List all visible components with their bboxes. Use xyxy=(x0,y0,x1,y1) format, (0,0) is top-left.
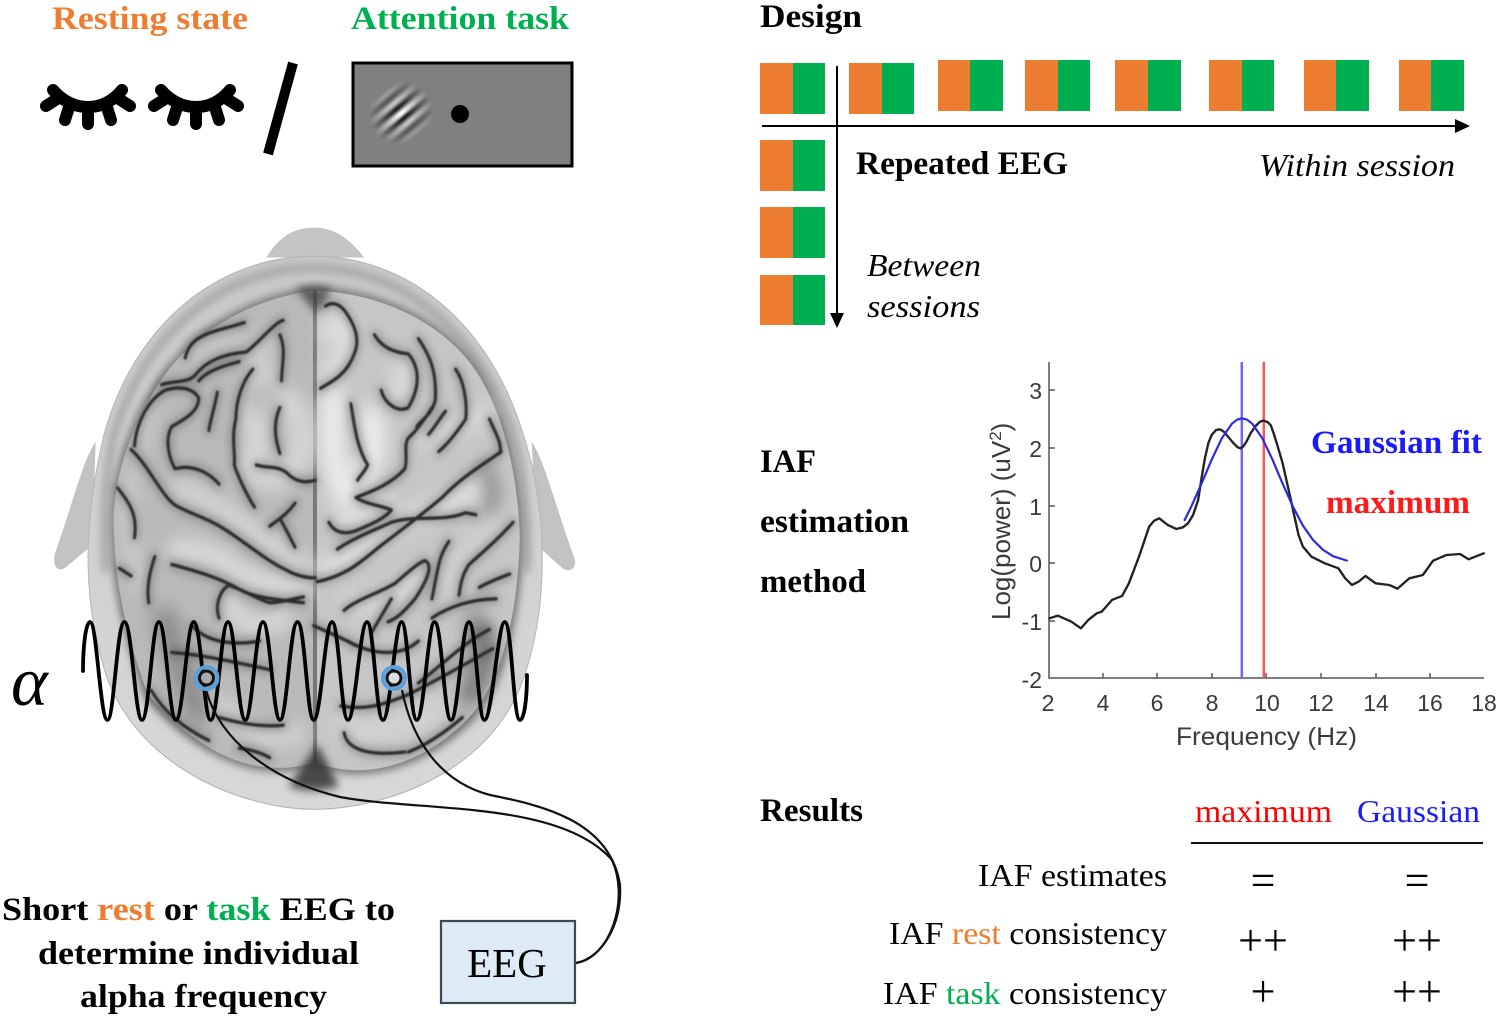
y axis title: Log(power) (uV xyxy=(986,441,1016,620)
x axis tick labels xyxy=(1042,690,1497,716)
column header: maximum: maximum xyxy=(1195,793,1332,829)
x axis title: Frequency (Hz) xyxy=(1176,723,1357,751)
nose bump xyxy=(266,228,364,258)
row: IAF rest consistency: ++ xyxy=(1238,916,1288,965)
right hemisphere xyxy=(317,291,520,770)
row: IAF rest consistency xyxy=(889,915,1442,965)
arrow: between sessions axis xyxy=(830,66,844,328)
right ear xyxy=(532,442,575,570)
heading: design: Design xyxy=(760,0,862,35)
x axis tick labels: 16 xyxy=(1417,690,1443,716)
head outline xyxy=(88,256,542,809)
icon: closed eyes xyxy=(46,90,238,124)
design diagram: within-session blocks xyxy=(760,60,1464,114)
label: repeated EEG: Repeated EEG xyxy=(856,146,1068,182)
legend: maximum: maximum xyxy=(1326,485,1470,521)
icon: right closed eye xyxy=(154,90,238,124)
marker: maximum line xyxy=(1263,362,1265,678)
x axis tick labels: 4 xyxy=(1097,690,1110,716)
row: IAF task consistency: IAF task consistency xyxy=(883,975,1167,1011)
arrow: within session axis xyxy=(762,119,1470,133)
y axis tick labels: 2 xyxy=(1029,436,1042,462)
left hemisphere xyxy=(114,291,313,768)
y axis title: 2 xyxy=(986,431,1005,441)
y axis tick labels: 1 xyxy=(1029,494,1042,520)
x axis tick labels: 10 xyxy=(1254,690,1280,716)
y axis tick labels xyxy=(1022,378,1042,693)
alpha symbol: α xyxy=(11,644,49,721)
label: IAF estimation method: IAF xyxy=(760,444,816,480)
x axis tick labels: 12 xyxy=(1308,690,1334,716)
label: IAF estimation method xyxy=(760,444,909,600)
cable: right electrode to EEG box xyxy=(402,690,620,963)
fixation dot xyxy=(451,105,469,123)
heading: results: Results xyxy=(760,793,863,829)
caption: short rest or task EEG xyxy=(2,892,395,1015)
electrode left xyxy=(196,667,218,689)
alpha wave xyxy=(83,622,527,720)
column header: Gaussian: Gaussian xyxy=(1357,793,1480,829)
caption: short rest or task EEG: alpha frequency xyxy=(80,979,328,1015)
x axis tick labels: 6 xyxy=(1151,690,1163,716)
line chart: power spectrum xyxy=(986,362,1497,751)
sulci soft shading xyxy=(118,304,513,758)
heading: resting state: Resting state xyxy=(52,1,248,37)
label: between sessions xyxy=(867,247,981,324)
row: IAF task consistency: ++ xyxy=(1392,967,1442,1016)
chart axes xyxy=(1049,362,1484,678)
slash separator xyxy=(268,63,293,154)
x axis tick labels: 2 xyxy=(1042,690,1054,716)
label: between sessions: sessions xyxy=(867,288,980,324)
y axis tick labels: -2 xyxy=(1022,667,1042,693)
row: IAF rest consistency: IAF rest consistency xyxy=(889,915,1167,951)
row: IAF estimates: IAF estimates xyxy=(978,857,1167,893)
gabor patch xyxy=(371,83,431,142)
gyri highlights xyxy=(128,320,503,739)
sulci lines xyxy=(118,304,513,758)
design diagram: between-session blocks xyxy=(760,140,825,325)
x axis tick labels: 18 xyxy=(1471,690,1497,716)
brain illustration on head xyxy=(54,228,575,809)
y axis tick labels: 0 xyxy=(1029,551,1042,577)
row: IAF estimates: = xyxy=(1251,856,1275,905)
row: IAF estimates: = xyxy=(1405,856,1429,905)
x axis tick labels: 14 xyxy=(1363,690,1389,716)
label: IAF estimation method: estimation xyxy=(760,504,909,540)
dark cavity top and bottom xyxy=(295,286,332,314)
electrode right xyxy=(383,667,405,689)
x axis tick labels: 8 xyxy=(1206,690,1218,716)
y axis tick labels: -1 xyxy=(1022,609,1042,635)
marker: Gaussian peak line xyxy=(1241,362,1243,678)
legend: Gaussian fit: Gaussian fit xyxy=(1311,425,1482,461)
icon: attention task stimulus screen xyxy=(353,63,572,166)
heading: attention task: Attention task xyxy=(351,1,570,37)
cable: left electrode to EEG box xyxy=(206,690,619,963)
EEG box xyxy=(441,921,575,1003)
icon: left closed eye xyxy=(46,90,130,124)
caption: short rest or task EEG: determine individual xyxy=(38,936,359,972)
y axis title: ) xyxy=(986,423,1016,431)
caption: short rest or task EEG: Short rest or task EEG to xyxy=(2,892,395,928)
row: IAF rest consistency: ++ xyxy=(1392,916,1442,965)
label: within session: Within session xyxy=(1259,147,1455,183)
label: between sessions: Between xyxy=(867,247,981,283)
label: IAF estimation method: method xyxy=(760,564,866,600)
brain edge shadow xyxy=(110,287,523,774)
row: IAF task consistency xyxy=(883,967,1442,1016)
midline fissure xyxy=(312,297,320,760)
Gaussian fit curve xyxy=(1185,418,1347,561)
EEG box: EEG xyxy=(467,940,547,986)
y axis tick labels: 3 xyxy=(1029,378,1042,404)
power spectrum curve xyxy=(1049,421,1484,628)
row: IAF estimates xyxy=(978,856,1429,905)
row: IAF task consistency: + xyxy=(1251,967,1275,1016)
left ear xyxy=(54,442,96,569)
results table xyxy=(883,793,1483,1016)
